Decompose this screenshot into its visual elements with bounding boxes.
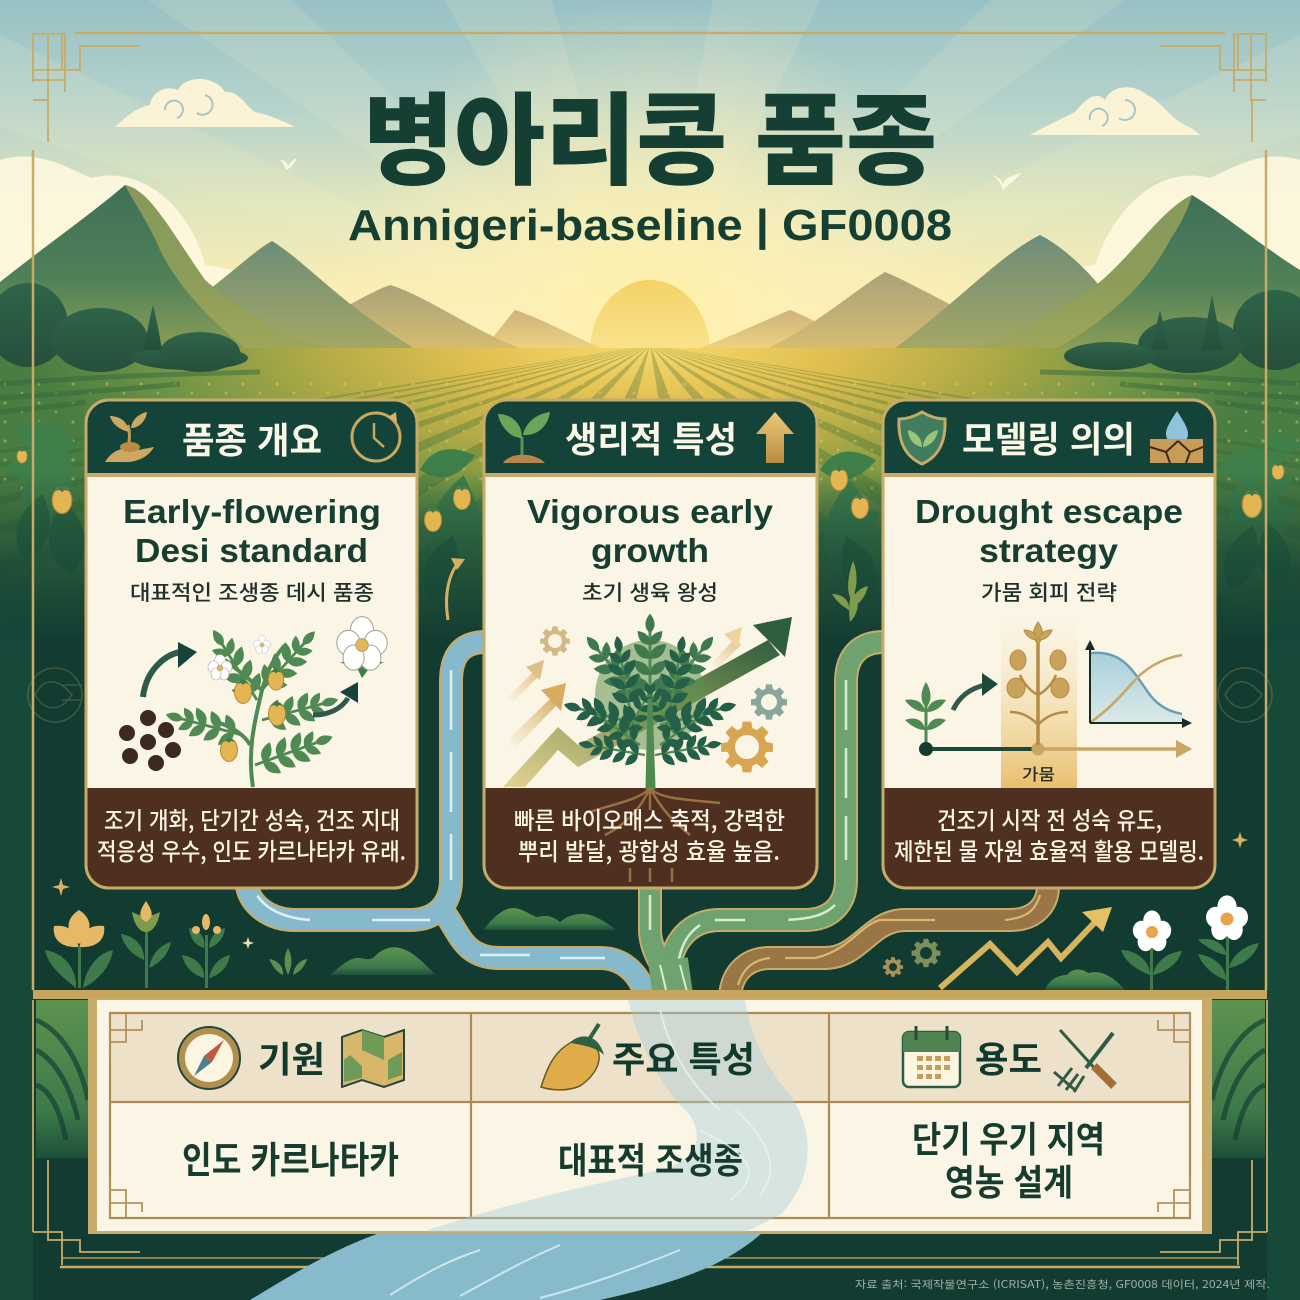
flower: bud: [132, 901, 160, 932]
illustration: gold mature plant: [1007, 622, 1069, 745]
chart: water vs maturity: [1085, 640, 1192, 728]
description: 적응성 우수, 인도 카르나타카 유래.: [97, 832, 406, 867]
illustration: seedling: [905, 682, 946, 745]
cloud right: [1030, 87, 1200, 135]
icon: tools: [1054, 1030, 1114, 1092]
description: [894, 801, 1204, 867]
left flowers and mounds: [45, 832, 1248, 990]
icon: up arrow: [756, 412, 794, 463]
sprout: [269, 948, 307, 975]
background sky: [0, 0, 1300, 360]
card headline: Desi standard: [135, 532, 368, 569]
sparkles: [52, 832, 1248, 896]
title: 병아리콩 품종: [363, 60, 937, 205]
field with rows: [0, 348, 1300, 616]
description: [97, 801, 406, 867]
card headline: strategy: [979, 532, 1119, 569]
description: 조기 개화, 단기간 성숙, 건조 지대: [104, 801, 400, 836]
column heading: 용도: [975, 1031, 1042, 1083]
icon: calendar: [903, 1026, 960, 1087]
flowers: white right: [1121, 895, 1259, 990]
sun: [590, 280, 710, 424]
icon: sprout: [498, 412, 550, 463]
card subhead: 가뭄 회피 전략: [981, 577, 1117, 607]
icon: field sprig: [832, 561, 868, 622]
side row bands: [0, 372, 1300, 412]
gold band above table: [33, 990, 1267, 999]
ornament: table corner frets: [110, 1013, 1190, 1218]
column heading: 주요 특성: [612, 1031, 755, 1083]
river: brown branch: [730, 886, 1048, 1000]
source note: 자료 출처: 국제작물연구소 (ICRISAT), 농촌진흥청, GF0008 데이터, 2024년 제작.: [855, 1277, 1270, 1292]
heading: 품종 개요: [182, 412, 322, 464]
icon: map: [342, 1030, 404, 1087]
foliage: side plant leaves: [2, 415, 1300, 606]
subtitle: Annigeri-baseline | GF0008: [348, 201, 952, 251]
table value: 영농 설계: [945, 1154, 1073, 1206]
mountains: [0, 185, 1300, 352]
river: lower main stream: [250, 1000, 808, 1300]
heading: 생리적 특성: [565, 411, 737, 463]
small clouds: [115, 79, 1200, 190]
illustration: roots: [590, 788, 720, 882]
description: 건조기 시작 전 성숙 유도,: [937, 801, 1162, 836]
river overlay on table: [423, 1000, 808, 1232]
side bushes along horizon: [0, 283, 1300, 373]
card headline: [123, 493, 381, 569]
birds: [280, 158, 1022, 190]
outer side bands: [0, 540, 1300, 1300]
river: green branches: [650, 642, 884, 1000]
panel: physiological traits: [484, 400, 817, 888]
flower: buds on stem: [192, 914, 221, 934]
table column: origin: [178, 1027, 404, 1184]
icon: gears: [540, 626, 787, 772]
icon: large flower: [337, 617, 387, 678]
icon: gears below cards: [883, 939, 940, 977]
illustration: chickpea plant: [161, 619, 343, 787]
icon: shield: [899, 412, 945, 464]
heading: 모델링 의의: [962, 411, 1135, 463]
sun rays: [0, 0, 1300, 345]
table value: 단기 우기 지역: [912, 1111, 1105, 1163]
icon: clock: [352, 412, 400, 461]
icon: compass: [178, 1027, 240, 1089]
arrow: plant to flower: [313, 682, 358, 715]
description: 뿌리 발달, 광합성 효율 높음.: [518, 832, 780, 867]
drought label: 가뭄: [1022, 761, 1055, 785]
ornament: faint side roundels: [28, 668, 1272, 722]
icon: water drop on cracked soil: [1150, 411, 1203, 463]
illustration: tree: [559, 614, 741, 788]
table value: 인도 카르나타카: [182, 1130, 399, 1184]
table column: use: [903, 1026, 1114, 1206]
card subhead: 초기 생육 왕성: [582, 577, 718, 607]
arrow: timeline: [919, 740, 1192, 758]
panel: modelling meaning: [883, 400, 1215, 888]
card headline: [527, 493, 774, 569]
panel: variety overview: [86, 400, 417, 888]
icon: seeds: [119, 710, 181, 771]
icon: hand with sprout: [105, 412, 154, 462]
lower dark ground: [0, 638, 1300, 1300]
arrow: gold curved field arrow: [446, 558, 465, 620]
table value: [912, 1111, 1105, 1206]
description: [514, 801, 785, 867]
flower: gold tulip: [54, 910, 104, 947]
mounds: [330, 947, 436, 975]
illustration: zigzag growth arrow: [503, 617, 792, 787]
arrow: growth: [953, 673, 998, 710]
river: blue branches: [247, 642, 648, 1000]
arrow: seed to plant: [143, 642, 197, 697]
foliage: pods on side plants: [17, 448, 1284, 532]
card headline: [915, 493, 1183, 569]
card headline: Drought escape: [915, 493, 1183, 530]
table value: 대표적 조생종: [558, 1132, 743, 1184]
icon: pod: [541, 1024, 602, 1090]
panel: bottom table: [88, 998, 1212, 1234]
description: 빠른 바이오매스 축적, 강력한: [514, 801, 785, 836]
card headline: growth: [591, 532, 709, 569]
big white clouds behind mountains: [0, 156, 1300, 350]
cloud left: [115, 79, 295, 127]
card headline: Vigorous early: [527, 493, 774, 530]
card headline: Early-flowering: [123, 493, 381, 530]
illustration: small arrows: [507, 627, 742, 748]
description: 제한된 물 자원 효율적 활용 모델링.: [894, 832, 1204, 867]
arrow: gold zigzag growth: [940, 907, 1112, 988]
card subhead: 대표적인 조생종 데시 품종: [130, 577, 374, 607]
stream highlights: [390, 1010, 770, 1298]
table column: key traits: [541, 1024, 755, 1184]
column heading: 기원: [258, 1031, 325, 1083]
rivers flowing from the cards: [247, 642, 1048, 1000]
side hills beside table: [36, 1000, 1265, 1158]
